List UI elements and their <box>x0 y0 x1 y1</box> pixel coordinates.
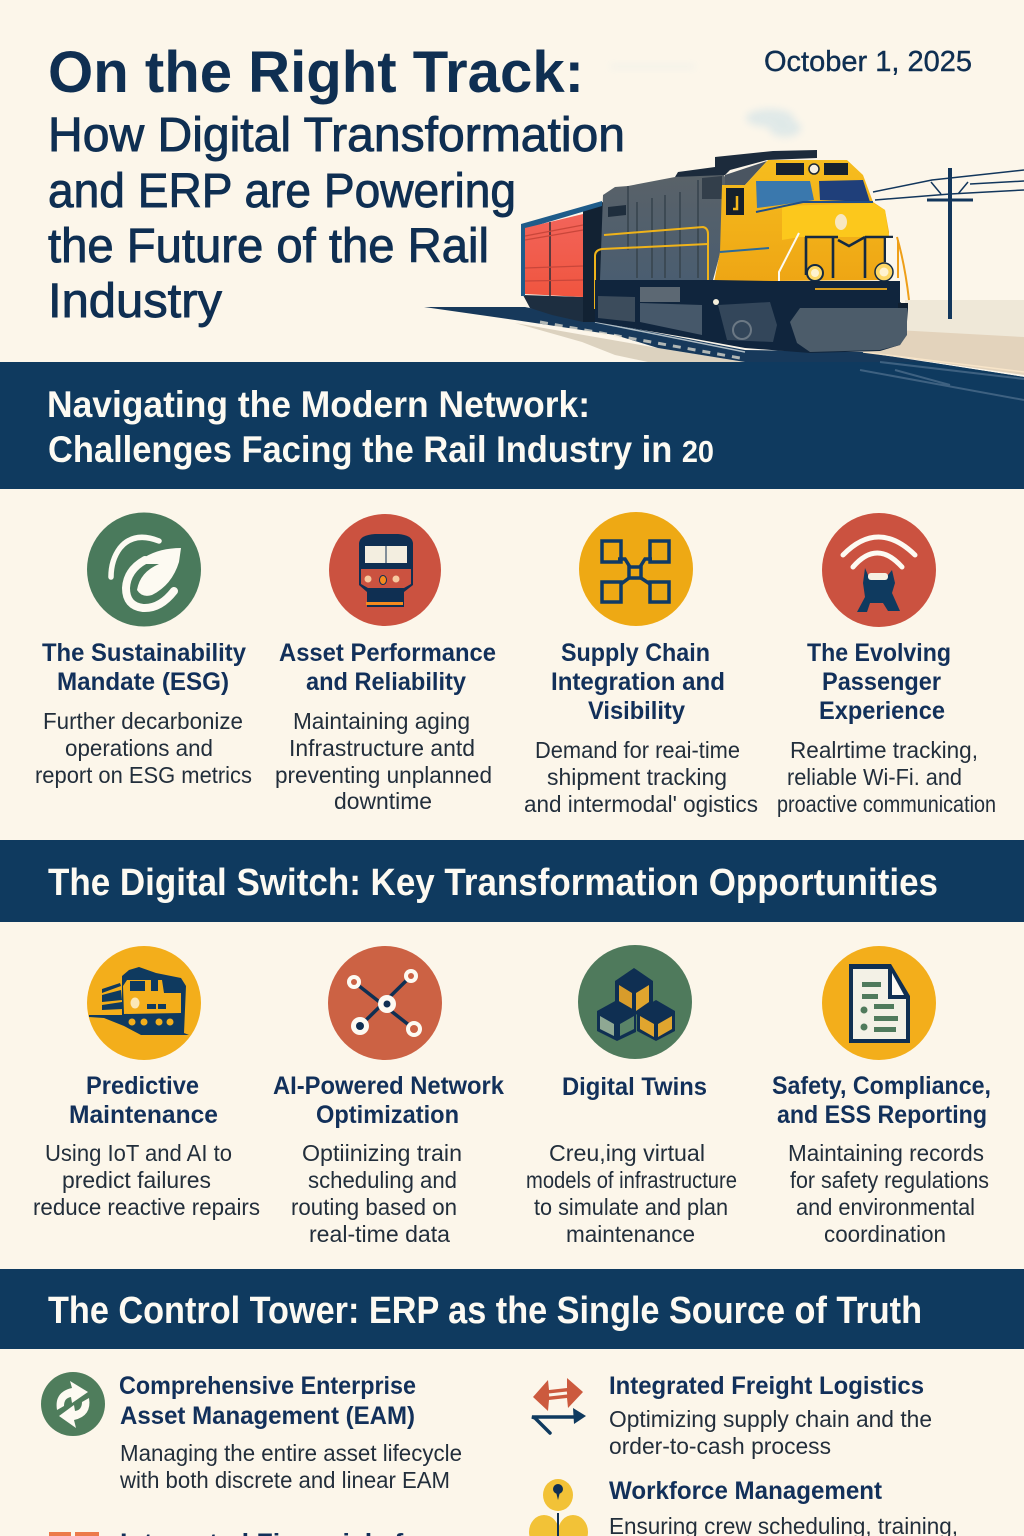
heading: The Sustainability <box>42 639 246 667</box>
section band: challenges <box>0 362 1024 489</box>
heading <box>807 639 951 725</box>
panel: clipped financials row <box>49 1529 430 1536</box>
heading <box>69 1072 218 1129</box>
heading <box>42 639 246 696</box>
description <box>524 737 758 817</box>
description: Realrtime tracking, <box>790 737 978 763</box>
heading: Mandate (ESG) <box>57 668 229 696</box>
locomotive undercarriage <box>595 280 908 353</box>
description: with both discrete and linear EAM <box>119 1467 450 1493</box>
heading: Asset Performance <box>279 639 496 667</box>
description: Optimizing supply chain and the <box>609 1406 932 1432</box>
section heading: Navigating the Modern Network: <box>47 384 590 425</box>
icon: network nodes <box>328 946 442 1060</box>
panel: network optimization <box>273 946 504 1247</box>
description: reduce reactive repairs <box>33 1194 260 1220</box>
heading <box>279 639 496 696</box>
description <box>526 1140 737 1247</box>
description: maintenance <box>566 1221 695 1247</box>
section heading <box>47 384 714 470</box>
heading: Digital Twins <box>562 1073 707 1101</box>
heading: Integrated Freight Logistics <box>609 1372 924 1400</box>
description: report on ESG metrics <box>35 762 252 788</box>
heading: Maintenance <box>69 1101 218 1129</box>
description: Creu,ing virtual <box>549 1140 705 1166</box>
panel: sustainability mandate <box>35 512 252 788</box>
subtitle: and ERP are Powering <box>48 165 516 218</box>
subtitle: Industry <box>48 275 222 328</box>
icon: cycle arrows <box>41 1372 105 1436</box>
description: scheduling and <box>308 1167 457 1193</box>
description: Maintaining records <box>788 1140 984 1166</box>
description: downtime <box>334 788 432 814</box>
icon: leaf <box>87 512 201 626</box>
description: for safety regulations <box>790 1167 989 1193</box>
panel: enterprise asset management <box>41 1372 462 1493</box>
icon: document <box>822 946 936 1060</box>
description <box>291 1140 462 1247</box>
panel: asset performance <box>275 514 496 814</box>
heading: Experience <box>819 697 945 725</box>
panel: predictive maintenance <box>33 946 260 1220</box>
description: real-time data <box>309 1221 450 1247</box>
icon: worker <box>529 1479 588 1536</box>
description: Maintaining aging <box>293 708 470 734</box>
heading: Supply Chain <box>561 639 710 667</box>
description: preventing unplanned <box>275 762 492 788</box>
icon: orange squares <box>49 1532 99 1536</box>
heading: Integration and <box>551 668 725 696</box>
heading: and Reliability <box>306 668 466 696</box>
description: Using IoT and AI to <box>45 1140 232 1166</box>
heading: Predictive <box>86 1072 199 1100</box>
section band: control tower <box>0 1269 1024 1349</box>
subtitle: the Future of the Rail <box>48 220 489 273</box>
illustration: locomotive on track <box>424 65 1024 400</box>
icon: train front <box>329 514 441 626</box>
icon: locomotive <box>87 946 201 1060</box>
date: October 1, 2025 <box>764 46 972 78</box>
heading <box>273 1072 504 1129</box>
description <box>35 708 252 788</box>
description: Managing the entire asset lifecycle <box>120 1440 462 1466</box>
description: Further decarbonize <box>43 708 243 734</box>
icon: network squares <box>579 512 693 626</box>
subtitle <box>48 109 625 328</box>
description: order-to-cash process <box>609 1433 831 1459</box>
utility pole and wires <box>873 168 1024 319</box>
heading: AI-Powered Network <box>273 1072 504 1100</box>
subtitle: How Digital Transformation <box>48 109 625 162</box>
panel: integrated freight logistics <box>532 1372 932 1459</box>
section heading: The Control Tower: ERP as the Single Source of Truth <box>48 1290 922 1332</box>
heading: Visibility <box>588 697 685 725</box>
panel: workforce management <box>529 1477 958 1536</box>
description <box>119 1440 462 1493</box>
description <box>777 737 996 817</box>
description <box>33 1140 260 1220</box>
main title: On the Right Track: <box>48 40 584 105</box>
section heading: The Digital Switch: Key Transformation Opportunities <box>48 862 938 904</box>
header title block <box>48 40 625 328</box>
description: Optiinizing train <box>302 1140 462 1166</box>
icon: wifi and passenger <box>822 513 936 627</box>
description: reliable Wi-Fi. and <box>787 764 962 790</box>
description: predict failures <box>62 1167 211 1193</box>
description: operations and <box>65 735 213 761</box>
description: and environmental <box>796 1194 975 1220</box>
heading: Safety, Compliance, <box>772 1072 991 1100</box>
description <box>275 708 492 814</box>
freight wagon <box>521 201 603 322</box>
heading: The Evolving <box>807 639 951 667</box>
description: to simulate and plan <box>534 1194 728 1220</box>
description: and intermodal' ogistics <box>524 791 758 817</box>
panel: digital twins <box>526 945 737 1247</box>
heading: Comprehensive Enterprise <box>119 1372 416 1400</box>
panel: safety and compliance <box>772 946 991 1247</box>
panel: passenger experience <box>777 513 996 817</box>
icon: double arrows <box>532 1378 586 1433</box>
section band: opportunities <box>0 840 1024 922</box>
heading <box>772 1072 991 1129</box>
ground and track <box>424 300 1024 400</box>
description <box>609 1406 932 1459</box>
faint clouds <box>610 65 801 137</box>
heading: Passenger <box>822 668 941 696</box>
heading: Asset Management (EAM) <box>120 1402 415 1430</box>
panel: supply chain <box>524 512 758 817</box>
icon: cubes <box>578 945 692 1059</box>
description: proactive communication <box>777 791 996 817</box>
heading <box>551 639 725 725</box>
description <box>788 1140 989 1247</box>
section heading: Challenges Facing the Rail Industry in 20 <box>48 429 714 470</box>
description: Infrastructure antd <box>289 735 475 761</box>
heading: Optimization <box>316 1101 459 1129</box>
description: shipment tracking <box>547 764 727 790</box>
description: routing based on <box>291 1194 457 1220</box>
description: models of infrastructure <box>526 1167 737 1193</box>
heading: Workforce Management <box>609 1477 883 1505</box>
description: Demand for reai-time <box>535 737 740 763</box>
locomotive body <box>595 150 909 317</box>
heading: and ESS Reporting <box>777 1101 987 1129</box>
description: coordination <box>824 1221 946 1247</box>
heading <box>119 1372 416 1430</box>
